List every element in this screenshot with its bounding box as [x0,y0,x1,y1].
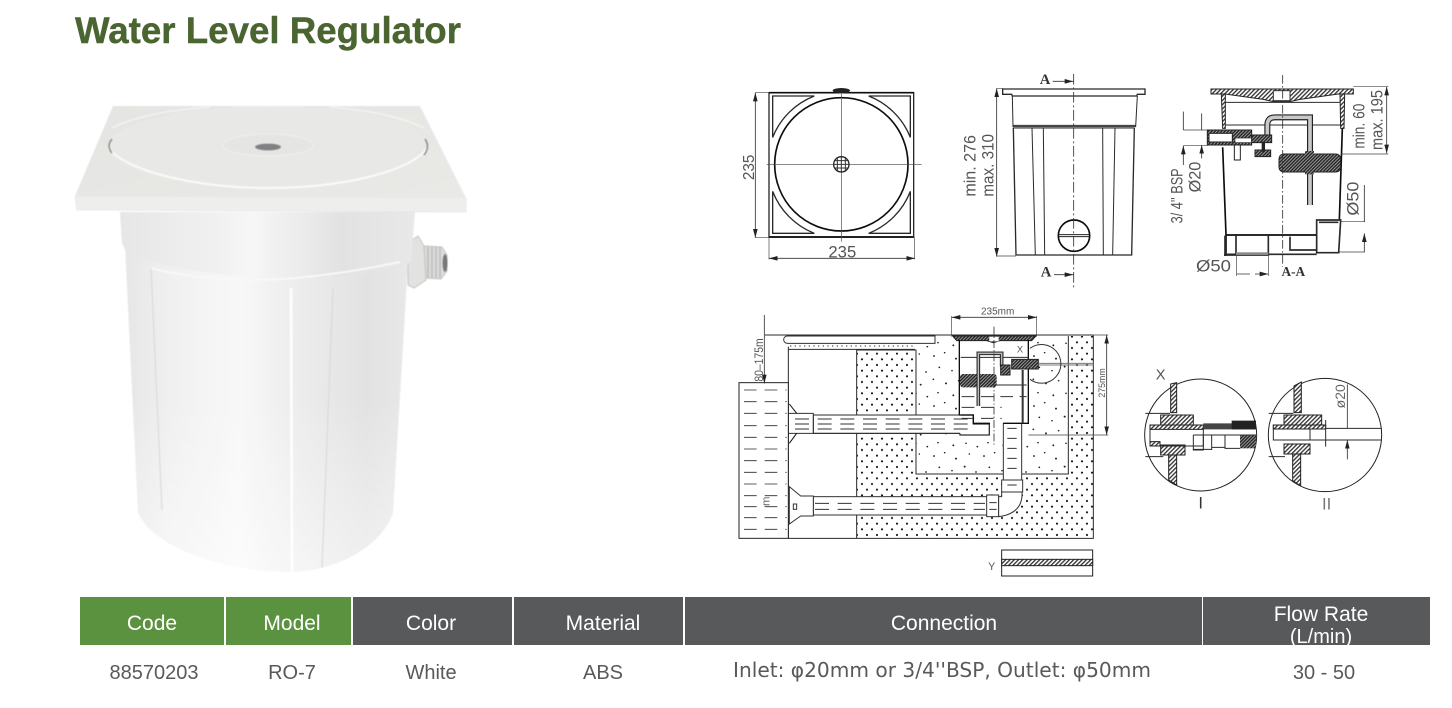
title: Water Level Regulator [75,10,461,51]
header: Connection [685,597,1202,645]
lower body walls [1223,128,1342,255]
dimension: 3/4 BSP [1167,112,1207,223]
header: Model: Model [263,612,321,635]
dimension: 235mm: 235mm [981,307,1014,318]
vertical drain pipe [1002,423,1023,492]
outer square [769,93,914,237]
value: color: White [405,662,457,684]
value: code: 88570203 [110,662,198,684]
dimension: height: 235 [741,155,758,180]
label II: II [1322,494,1331,513]
inlet valve [1207,130,1272,160]
lid disc [108,106,428,188]
header: Model [226,597,351,645]
section mark bottom: A [1041,265,1052,281]
inner ledges [1225,102,1342,125]
dimension: 275mm: 275mm [1097,368,1107,398]
pool coping [784,336,935,343]
product photo: regulator body [75,106,466,572]
dimension: 275mm [1028,335,1108,435]
regulator section [953,336,1093,423]
spec table [80,597,1430,684]
header: Code: Code [127,612,177,635]
section label: A-A [1281,264,1306,279]
lid hub [223,134,313,156]
ribs [1032,128,1115,255]
section mark top [1040,72,1073,88]
float [1279,154,1341,172]
dimension: min 60 max 195 [1342,87,1388,154]
dimension: height: max. 310 [978,134,997,197]
dimension: height [741,93,769,238]
header: Color [353,597,512,645]
header: Color: Color [406,612,456,635]
top and bottom edges [769,93,914,237]
lid hole [1273,91,1290,101]
detail II: ø20 [1332,384,1348,408]
cylinder lower body [125,245,408,572]
value: model: RO-7 [268,662,316,684]
side outlet [1290,220,1341,253]
drawing: section A-A [1167,75,1388,279]
pool water [739,383,788,538]
dimension: inlet diameter: Ø20 [1186,162,1205,192]
top flange [1211,89,1353,102]
drawing: installation diagram [739,307,1108,576]
dimension: 80-175m: 80–175m [752,338,766,382]
label X: X [1156,367,1166,383]
cylinder collar [120,212,415,278]
dimension: side outlet diameter [1339,182,1365,252]
flange top [75,106,466,198]
lid circle [775,98,908,231]
header: Flow Rate: (L/min) [1290,626,1352,648]
section mark top: A [1040,72,1051,88]
header: Connection: Connection [891,612,997,635]
value: flow rate: 30 - 50 [1293,662,1355,684]
drawing: top view [741,88,922,261]
lid rim [108,147,428,188]
tapered body [1013,128,1134,255]
drawing: side view [961,72,1145,288]
header: Material: Material [566,612,640,635]
dimension: side outlet diameter: Ø50 [1344,182,1363,216]
ground fill [857,336,1093,538]
dimension: 3/4 BSP: 3/ 4'' BSP [1167,168,1186,223]
dimension: 235mm [952,307,1037,337]
dimension: width [769,237,915,261]
lid hole [255,144,281,150]
deck line [765,333,1093,336]
centre lines [767,94,922,242]
drawing: connection details [1145,367,1382,513]
header: Flow Rate [1203,597,1430,648]
section line [1072,74,1075,288]
dimension: bottom outlet diameter [1196,255,1268,276]
regulator body cavity [959,337,1028,435]
detail I [1145,379,1257,491]
section mark bottom [1041,265,1073,281]
corner recesses [773,96,910,233]
dimension: min 60 max 195: min. 60 [1349,104,1368,149]
concrete fill [916,336,1068,474]
label I: I [1198,494,1203,513]
dimension: bottom outlet diameter: Ø50 [1196,256,1231,275]
pool wall [788,347,915,538]
lid groove [109,139,428,155]
flange front edge [75,196,466,212]
outlet [1058,220,1090,251]
header: Flow Rate: Flow Rate [1274,603,1368,626]
lid rim top [112,107,424,128]
dimension: width: 235 [828,242,856,261]
bottom plate [1226,232,1317,237]
tab [833,88,850,93]
pipe fitting [408,236,448,288]
dimension: height: min. 276 [961,135,980,197]
header: Code [80,597,224,645]
flange [1003,89,1145,96]
panel seams [150,262,400,572]
detail X callout: X [1017,345,1024,355]
centre line [993,327,995,445]
centre hole [834,157,849,172]
lower pipe [789,487,1022,524]
dimension: height [961,88,1016,257]
ground outlines [788,335,1093,538]
float arm [1267,117,1310,205]
bottom outlet [1225,236,1317,255]
cylinder lower fade [130,400,400,572]
upper body walls [1221,94,1345,128]
collar [1012,96,1137,128]
centre line [1281,75,1284,267]
value: material: ABS [583,662,623,684]
dimension: min 60 max 195: max. 195 [1367,90,1386,150]
detail Y [988,550,1093,576]
detail X callout [1017,344,1061,383]
detail II [1268,378,1382,492]
upper pipe [788,404,989,443]
dimension: inlet diameter [1186,113,1205,192]
pool water: m [760,497,772,506]
header: Material [514,597,683,645]
detail Y: Y [988,561,995,573]
value: connection: Inlet: φ20mm or 3/4''BSP, Outlet: φ50mm [733,658,1151,682]
